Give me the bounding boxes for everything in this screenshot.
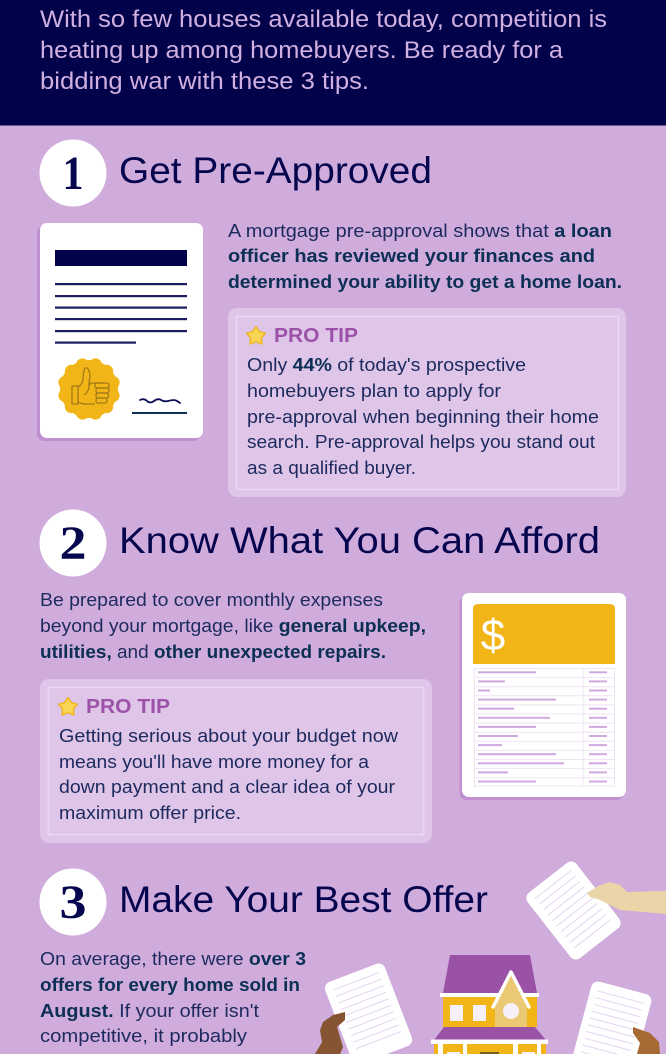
offer sheet: left [323,961,414,1054]
icon: star [246,326,266,344]
step 2 description: beyond your mortgage, like general upkeep, [40,615,426,636]
pro tip text: search. Pre-approval helps you stand out [247,431,595,452]
step 3 description [40,948,306,1046]
panel: pro tip 1 [228,308,626,497]
intro text: bidding war with these 3 tips. [40,68,369,95]
step 1 description [228,220,622,292]
offer sheet: right [571,980,653,1054]
step 2 heading: Know What You Can Afford [119,520,600,561]
step 3 description: offers for every home sold in [40,974,300,995]
pro tip text [247,354,599,478]
step 2 description [40,589,426,662]
hand: left [315,1012,345,1054]
offer sheet: top right [524,859,623,962]
pro tip text [59,725,399,823]
step 3 description: On average, there were over 3 [40,948,306,969]
step 3 description: August. If your offer isn't [40,1000,259,1021]
pro tip text: pre-approval when beginning their home [247,406,599,427]
step 3 description: competitive, it probably [40,1025,248,1046]
header banner [0,0,666,126]
illustration: pre-approval document [37,223,203,441]
house [431,955,548,1054]
illustration: budget sheet [460,593,626,800]
icon: star [58,698,78,715]
step 1 heading: Get Pre-Approved [119,150,432,191]
dollar sign: $ [481,611,505,660]
hand: top right [587,882,666,914]
step 1 description: A mortgage pre-approval shows that a loan [228,220,612,241]
step 3 number badge [40,868,106,936]
intro text [40,6,607,95]
pro tip text: maximum offer price. [59,802,241,823]
step 1 number badge [40,140,106,206]
pro tip text: Only 44% of today's prospective [247,354,526,375]
step 3 number badge: 3 [60,876,86,929]
intro text: With so few houses available today, competition is [40,6,607,33]
pro tip text: homebuyers plan to apply for [247,380,501,401]
step 1 number badge: 1 [62,147,84,200]
signature [132,399,187,414]
budget table [474,668,614,786]
panel: pro tip 2 [40,679,432,843]
hand: right [633,1027,660,1054]
pro tip text: Getting serious about your budget now [59,725,399,746]
intro text: heating up among homebuyers. Be ready for a [40,37,564,64]
step 2 number badge: 2 [60,517,86,570]
icon: thumbs-up seal [58,358,120,420]
illustration: house with competing offers [315,859,666,1054]
pro tip label: PRO TIP [274,324,358,347]
step 1 description: determined your ability to get a home loan. [228,271,622,292]
step 2 description: Be prepared to cover monthly expenses [40,589,383,610]
step 3 heading: Make Your Best Offer [119,879,488,920]
pro tip text: means you'll have more money for a [59,751,370,772]
pro tip text: as a qualified buyer. [247,457,416,478]
step 1 description: officer has reviewed your finances and [228,245,595,266]
step 2 number badge [40,510,106,576]
pro tip text: down payment and a clear idea of your [59,776,395,797]
pro tip label: PRO TIP [86,695,170,718]
step 2 description: utilities, and other unexpected repairs. [40,641,386,662]
